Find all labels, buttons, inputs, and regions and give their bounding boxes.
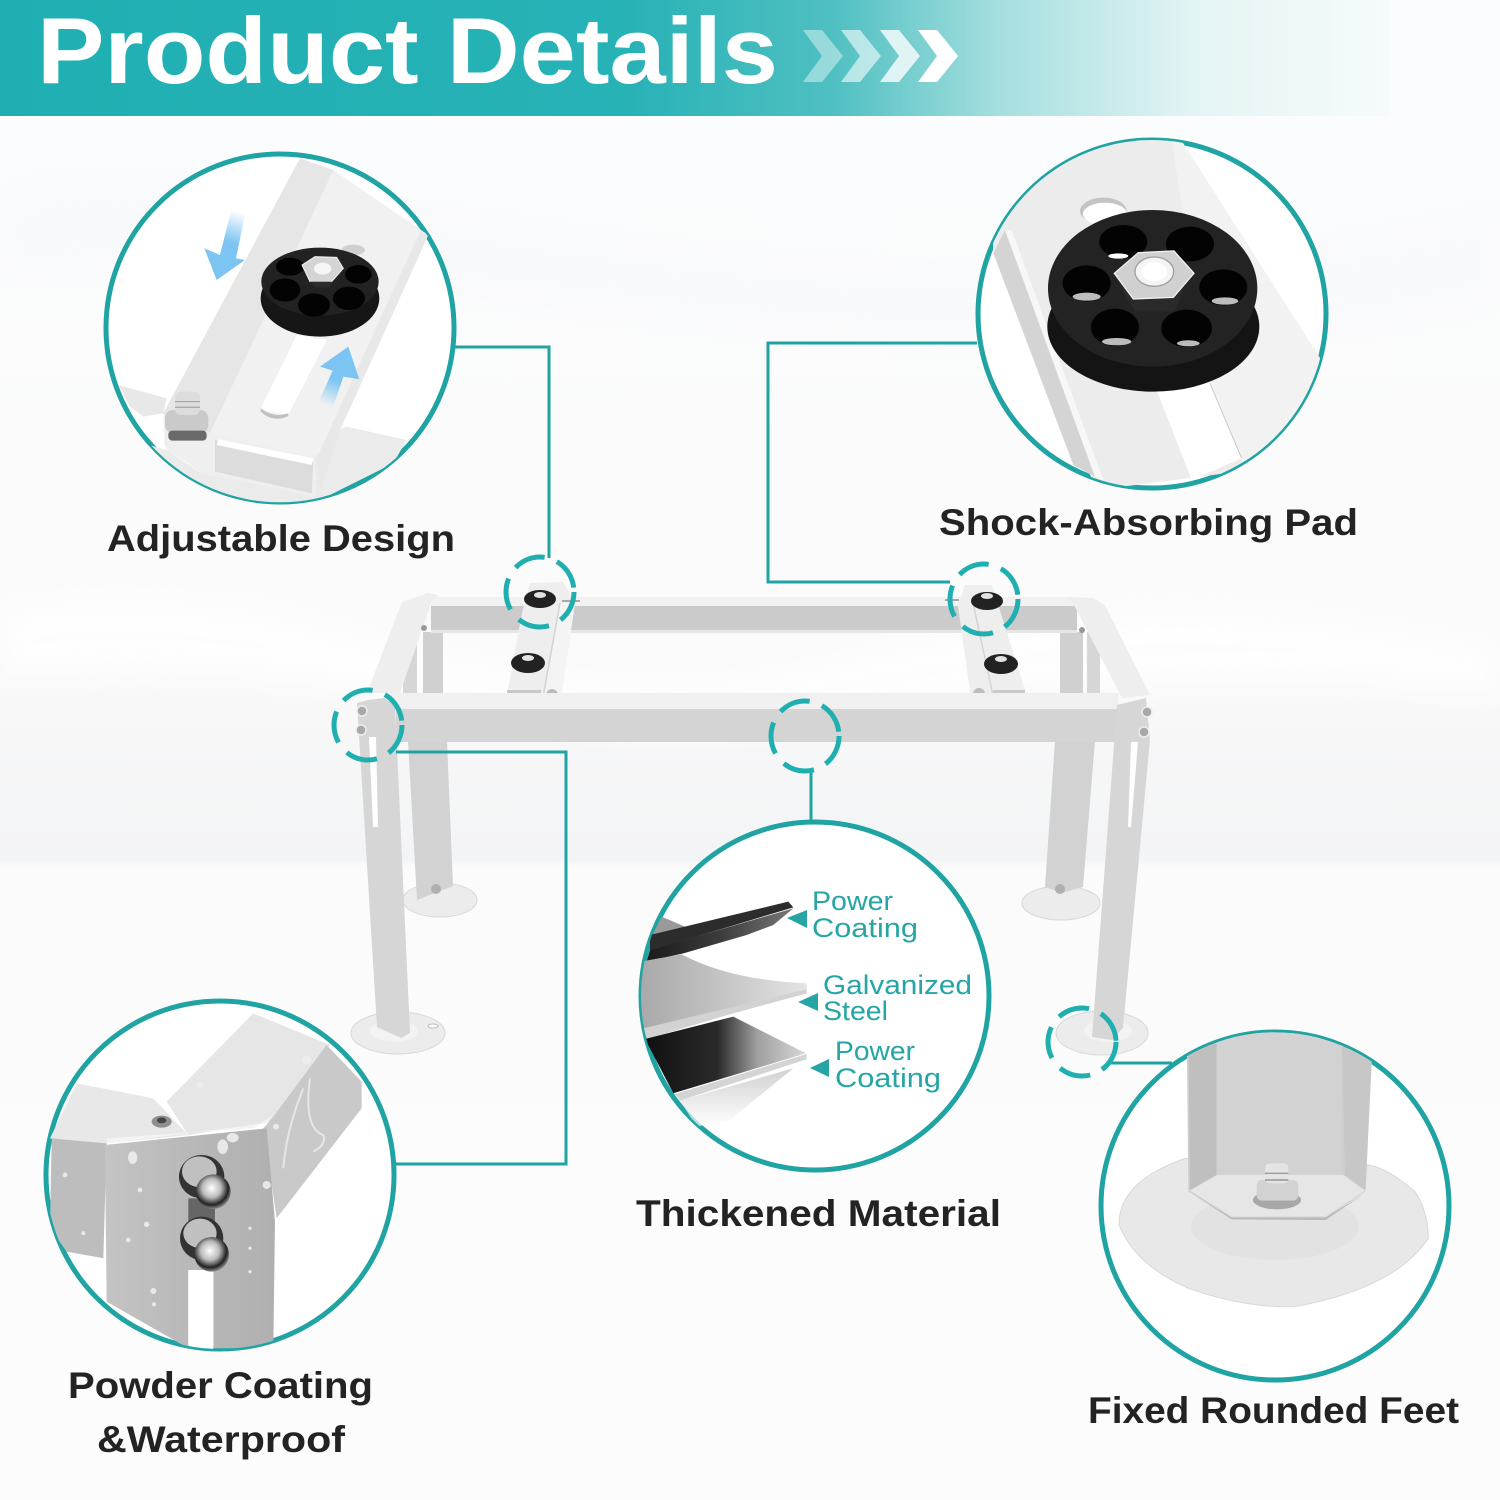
- front feet: [351, 1011, 1148, 1055]
- panel: thickened material: [637, 822, 989, 1170]
- product: air conditioner stand frame: [351, 582, 1152, 1055]
- heading: shock-absorbing pad: Shock-Absorbing Pad: [939, 502, 1358, 543]
- title: Product Details: [37, 0, 778, 103]
- heading: powder coating and waterproof: [68, 1365, 373, 1460]
- panel: adjustable design: [106, 154, 454, 507]
- side rails: [367, 593, 1150, 698]
- callout: galvanized steel: [823, 970, 972, 1026]
- icon: chevron arrows: [803, 30, 958, 82]
- back legs: [403, 632, 1100, 694]
- front legs: [356, 698, 1152, 1040]
- heading: fixed rounded feet: Fixed Rounded Feet: [1088, 1390, 1459, 1431]
- right cross bracket: [945, 585, 1025, 705]
- panel: powder coating and waterproof: [46, 1001, 394, 1352]
- callout: power coating bottom: Coating: [835, 1063, 941, 1093]
- detail photo: wet corner with chrome bolts: [50, 1013, 362, 1352]
- heading: thickened material: Thickened Material: [636, 1193, 1001, 1234]
- callout: galvanized steel: Galvanized: [823, 970, 972, 1000]
- callout: power coating top: Power: [812, 886, 893, 916]
- detail photo: material layers: [637, 902, 807, 1127]
- callout: power coating top: [812, 886, 918, 943]
- callout: power coating bottom: Power: [835, 1036, 915, 1066]
- callout: power coating bottom: [835, 1036, 941, 1093]
- detail photo: slotted bracket with pad: [118, 158, 428, 507]
- dashed markers: [334, 557, 1116, 1076]
- callout: power coating top: Coating: [812, 913, 918, 943]
- detail photo: round foot plate: [1119, 1025, 1428, 1307]
- heading: powder coating and waterproof: &Waterproof: [97, 1419, 346, 1460]
- heading: powder coating and waterproof: Powder Coating: [68, 1365, 373, 1406]
- detail photo: rubber pad and nut: [990, 130, 1323, 490]
- panel: shock-absorbing pad: [978, 130, 1326, 490]
- back beam: [425, 597, 1077, 633]
- leader lines: [394, 343, 1172, 1164]
- left cross bracket: [488, 582, 580, 705]
- inner feet and legs: [403, 741, 1100, 920]
- panel: fixed rounded feet: [1101, 1025, 1449, 1380]
- callout pointers: [787, 910, 829, 1077]
- header banner: [0, 0, 1390, 116]
- callout: galvanized steel: Steel: [823, 996, 888, 1026]
- front beam: [389, 693, 1119, 742]
- heading: adjustable design: Adjustable Design: [107, 518, 455, 559]
